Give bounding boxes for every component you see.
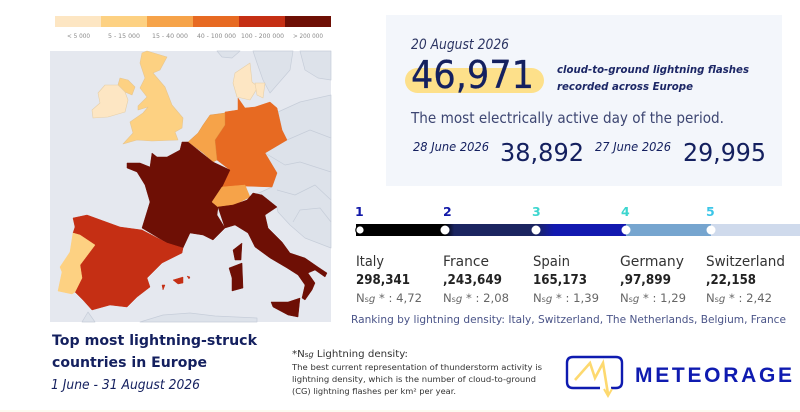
rank 4: Germany: Germany [620,254,684,270]
footnote: lightning density definition: The best current representation of thunderstorm activity is [291,363,542,372]
legend: flash count classes: > 200 000 [293,33,323,40]
rank 5: Switzerland: Switzerland [706,254,785,270]
title: countries in Europe [52,355,207,371]
France [127,142,230,248]
third most active day: 27 June 2026 [595,140,671,154]
date of peak day: 20 August 2026 [411,37,509,53]
title: Top most lightning-struck [52,333,257,349]
statement: The most electrically active day of the period. [410,109,724,127]
footnote: lightning density definition: (CG) lightning flashes per km² per year. [292,387,456,396]
logo: Meteorage: METEORAGE [635,364,792,387]
rank 5: Switzerland [706,254,785,305]
rank 5: Switzerland: Nsg * : 2,42 [706,291,772,305]
ranking by lightning density: Ranking by lightning density: Italy, Switzerland, The Netherlands, Belgium, France [351,313,786,326]
choropleth map of Europe [50,51,331,322]
footnote: lightning density definition: *Nsg Lightning density: [292,349,408,360]
rank 4: Germany [620,254,686,305]
highlight behind peak number [405,68,544,93]
rank 3: Spain: 165,173 [533,272,587,288]
logo: Meteorage [567,357,792,396]
ranking timeline: 2 [443,204,452,219]
second most active day: 28 June 2026 [413,140,489,154]
Ireland [92,85,128,118]
ranking timeline: 5 [706,204,715,219]
legend: flash count classes: < 5 000 [67,33,90,40]
rank 2: France [443,254,509,305]
legend: flash count classes: 5 - 15 000 [108,33,140,40]
title [52,333,257,371]
ranking timeline: 4 [621,204,630,219]
Denmark [233,63,265,100]
rank 5: Switzerland: ,22,158 [706,272,756,288]
peak description [557,63,749,93]
Portugal [58,233,95,294]
Northern Ireland [118,78,135,95]
rank 2: France: ,243,649 [443,272,502,288]
ranking timeline [355,204,800,236]
panel: most active day [386,15,782,186]
rank 3: Spain [533,254,599,305]
footnote: lightning density definition: lightning density, which is the number of cloud-to-ground [292,375,536,384]
ranking timeline: 1 [355,204,364,219]
legend: flash count classes [55,16,331,40]
legend: flash count classes: 40 - 100 000 [197,33,236,40]
Switzerland [212,185,250,207]
peak description: recorded across Europe [557,80,693,93]
Germany [215,98,287,187]
rank 1: Italy: 298,341 [356,272,410,288]
rank 2: France: Nsg * : 2,08 [443,291,509,305]
rank 1: Italy: Nsg * : 4,72 [356,291,422,305]
rank 1: Italy: Italy [356,254,384,270]
third most active day [595,138,766,167]
Netherlands and Belgium [188,113,225,162]
second most active day: 38,892 [500,138,584,167]
legend: flash count classes: 15 - 40 000 [152,33,188,40]
Spain [73,215,190,310]
United Kingdom [123,51,183,144]
rank 4: Germany: ,97,899 [620,272,671,288]
ranking timeline: 3 [532,204,541,219]
rank 3: Spain: Spain [533,254,570,270]
second most active day [413,138,584,167]
rank 3: Spain: Nsg * : 1,39 [533,291,599,305]
rank 4: Germany: Nsg * : 1,29 [620,291,686,305]
period: 1 June - 31 August 2026 [51,378,200,393]
third most active day: 29,995 [683,138,766,167]
peak description: cloud-to-ground lightning flashes [557,63,749,76]
rank 1: Italy [356,254,422,305]
legend: flash count classes: 100 - 200 000 [241,33,284,40]
Italy [218,193,327,317]
footnote: lightning density definition [291,349,542,396]
rank 2: France: France [443,254,489,270]
peak number: 46,971 [411,53,534,97]
